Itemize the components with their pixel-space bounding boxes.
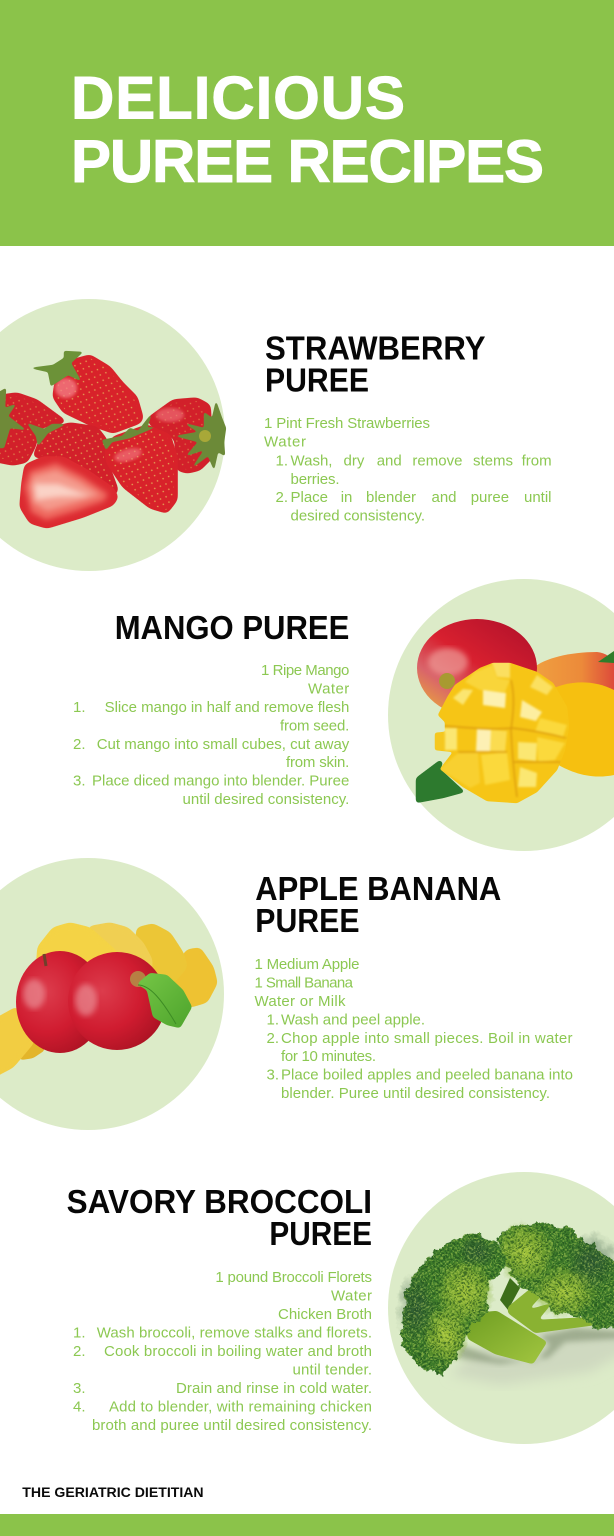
mango recipe text: 3. <box>73 772 86 790</box>
apple banana recipe text: Water or Milk <box>254 993 346 1010</box>
strawberry recipe text: Place <box>290 489 328 506</box>
strawberry recipe text: until <box>524 489 552 506</box>
panel: apple banana puree <box>0 858 573 1130</box>
strawberry recipe text: blender <box>366 489 416 506</box>
broccoli recipe text: Water <box>331 1288 372 1304</box>
broccoli recipe text: 1. <box>73 1324 86 1342</box>
broccoli recipe text: 1 pound Broccoli Florets <box>215 1269 372 1286</box>
broccoli recipe text: 3. <box>73 1380 86 1397</box>
apple banana recipe text: for 10 minutes. <box>281 1048 376 1065</box>
broccoli recipe text: Add to blender, with remaining chicken <box>109 1398 372 1416</box>
apple banana recipe text: 1. <box>266 1012 279 1028</box>
mango recipe text: 2. <box>73 736 86 753</box>
footer credit: THE GERIATRIC DIETITIAN <box>22 1485 204 1500</box>
strawberry recipe text: 1. <box>275 452 288 470</box>
mango recipe text: 1. <box>73 699 86 716</box>
broccoli recipe text: 2. <box>73 1343 86 1360</box>
mango recipe text: 1 Ripe Mango <box>261 662 349 679</box>
broccoli recipe text: Drain and rinse in cold water. <box>176 1380 372 1397</box>
broccoli recipe text: Chicken Broth <box>278 1306 372 1323</box>
mango recipe text: Cut mango into small cubes, cut away <box>97 736 350 753</box>
broccoli recipe text: until tender. <box>292 1362 372 1378</box>
strawberry recipe text <box>264 415 552 524</box>
broccoli recipe text <box>73 1269 372 1434</box>
strawberry recipe text: Water <box>264 434 306 450</box>
strawberry recipe text: dry <box>344 452 365 470</box>
title: DELICIOUS <box>71 64 405 132</box>
strawberry recipe text: Wash, <box>290 452 332 470</box>
strawberry recipe text: from <box>522 452 552 470</box>
strawberry circle <box>0 299 225 571</box>
mango recipe text: Place diced mango into blender. Puree <box>92 772 349 790</box>
apple banana recipe text: Wash and peel apple. <box>281 1012 425 1028</box>
panel: strawberry puree <box>0 299 552 571</box>
broccoli shadow <box>450 1325 614 1385</box>
strawberry heading <box>265 330 486 398</box>
broccoli recipe text: broth and puree until desired consistency. <box>92 1417 372 1434</box>
broccoli circle <box>388 1172 614 1444</box>
apple banana recipe text: Chop apple into small pieces. Boil in water <box>281 1030 572 1047</box>
mango recipe text: Slice mango in half and remove flesh <box>105 699 349 716</box>
icon: apples and bananas <box>0 923 217 1080</box>
mango recipe text: Water <box>308 680 349 698</box>
broccoli heading: SAVORY BROCCOLI <box>67 1183 372 1220</box>
strawberry recipe text: desired consistency. <box>290 508 425 524</box>
strawberry recipe text: berries. <box>290 471 340 488</box>
apple banana recipe text: blender. Puree until desired consistency. <box>281 1085 550 1102</box>
strawberry heading: PUREE <box>265 362 369 398</box>
apple banana recipe text: Place boiled apples and peeled banana into <box>281 1066 573 1084</box>
mango recipe text: from seed. <box>280 718 349 734</box>
apple banana heading: PUREE <box>255 902 360 939</box>
strawberry recipe text: 2. <box>275 489 288 506</box>
strawberry recipe text: and <box>432 489 457 506</box>
apple banana heading <box>255 870 501 939</box>
broccoli recipe text: Wash broccoli, remove stalks and florets. <box>97 1324 372 1342</box>
broccoli heading: PUREE <box>269 1215 372 1252</box>
apple banana recipe text <box>254 956 573 1102</box>
panel: mango puree <box>73 579 614 851</box>
apple banana recipe text: 2. <box>266 1030 279 1047</box>
strawberry recipe text: puree <box>471 489 509 506</box>
apple banana circle <box>0 858 224 1130</box>
strawberry recipe text: 1 Pint Fresh Strawberries <box>264 415 430 432</box>
mango recipe text: until desired consistency. <box>182 791 349 808</box>
apple banana recipe text: 3. <box>266 1066 279 1084</box>
panel: savory broccoli puree <box>67 1172 614 1444</box>
mango recipe text <box>73 662 350 808</box>
footer bar <box>0 1514 614 1536</box>
header banner <box>0 0 614 246</box>
broccoli recipe text: Cook broccoli in boiling water and broth <box>104 1343 372 1360</box>
mango recipe text: from skin. <box>286 754 349 771</box>
strawberry recipe text: and <box>377 452 402 470</box>
apple banana recipe text: 1 Small Banana <box>254 974 354 992</box>
strawberry recipe text: remove <box>412 452 462 470</box>
strawberry heading: STRAWBERRY <box>265 330 486 366</box>
icon: strawberries <box>0 351 226 528</box>
title: PUREE RECIPES <box>71 128 544 195</box>
broccoli heading <box>67 1183 372 1252</box>
mango heading: MANGO PUREE <box>115 609 349 646</box>
mango circle <box>388 579 614 851</box>
apple banana heading: APPLE BANANA <box>255 870 501 907</box>
strawberry recipe text: stems <box>473 452 513 470</box>
strawberry recipe text: in <box>341 489 352 506</box>
apple banana recipe text: 1 Medium Apple <box>254 956 360 973</box>
icon: broccoli <box>396 1221 614 1374</box>
broccoli recipe text: 4. <box>73 1398 86 1416</box>
icon: mangoes <box>416 619 614 803</box>
title <box>71 64 544 195</box>
